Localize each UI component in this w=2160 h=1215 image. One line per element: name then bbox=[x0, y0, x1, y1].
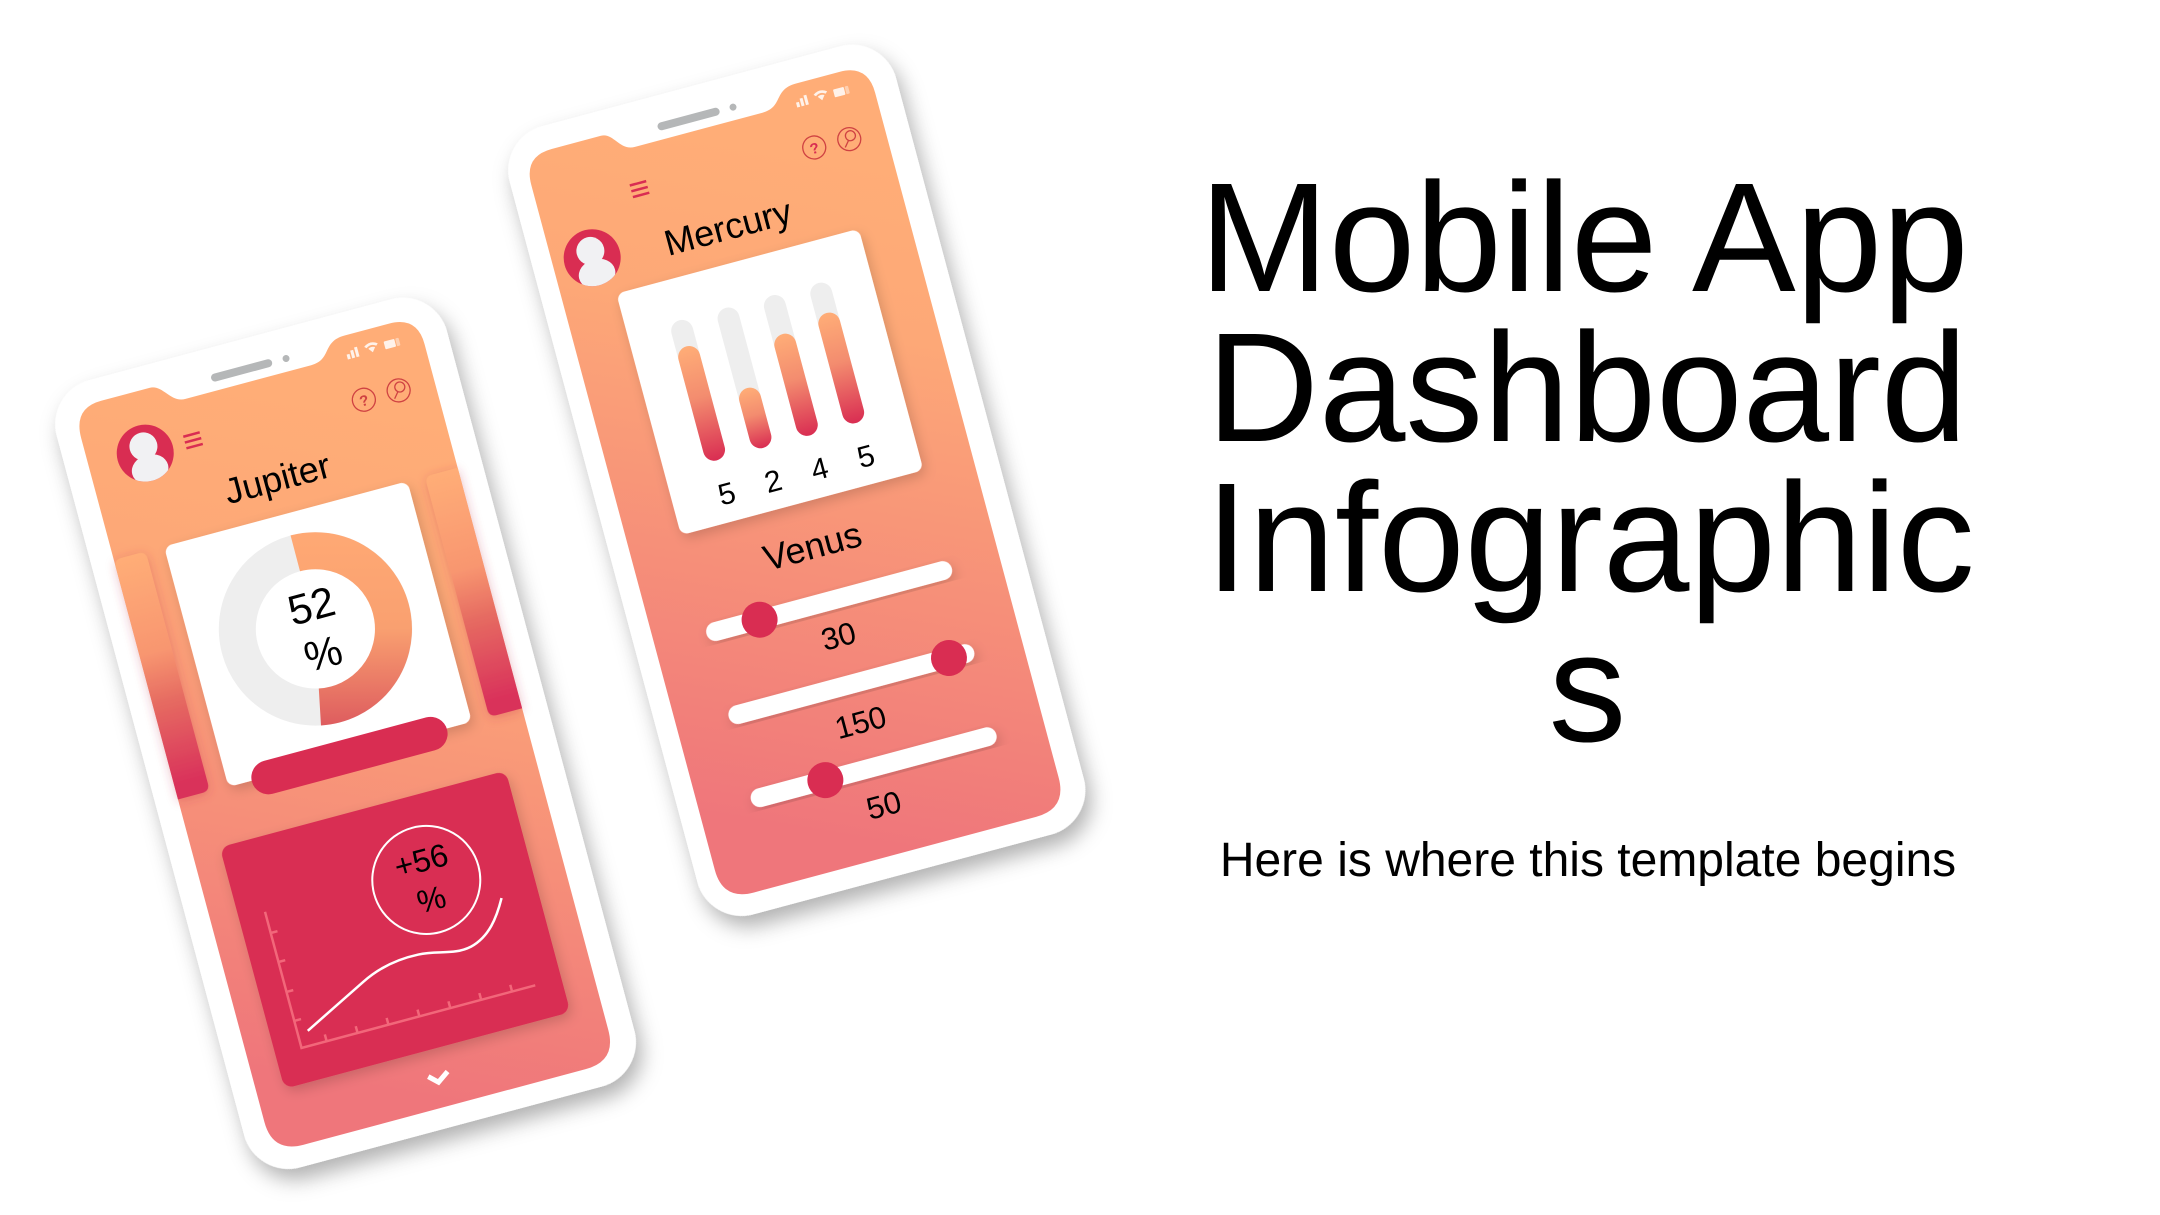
help icon bbox=[350, 386, 378, 414]
callout value: +56 bbox=[390, 836, 452, 885]
slider 50: 50 bbox=[863, 784, 905, 827]
line chart card bbox=[220, 771, 570, 1089]
trend line bbox=[288, 898, 522, 1031]
phone case bbox=[498, 34, 1096, 926]
title: Dashboard bbox=[1207, 300, 1967, 474]
slider 50 bbox=[746, 717, 1011, 855]
help icon: ? bbox=[358, 392, 371, 411]
slider 30 bbox=[702, 551, 966, 686]
camera dot bbox=[729, 103, 737, 111]
slider 150: 150 bbox=[831, 699, 890, 746]
axes bbox=[265, 849, 535, 1048]
phone: Mercury and Venus bbox=[498, 34, 1096, 926]
menu icon bbox=[183, 432, 203, 448]
speaker bbox=[662, 112, 716, 126]
phone: Jupiter bbox=[45, 287, 646, 1179]
callout circle bbox=[360, 814, 492, 946]
title: Infographic bbox=[1205, 450, 1975, 624]
bar values: 2 bbox=[761, 464, 786, 500]
heading: Mercury: Mercury bbox=[660, 190, 796, 264]
bar chart card bbox=[616, 229, 923, 535]
search icon bbox=[835, 125, 863, 153]
slider 150 bbox=[724, 634, 989, 772]
donut card bbox=[164, 481, 472, 787]
menu icon bbox=[630, 181, 649, 197]
side panel right bbox=[425, 468, 522, 717]
help icon: ? bbox=[808, 140, 821, 158]
camera dot bbox=[282, 354, 290, 363]
chevron bbox=[428, 1071, 450, 1084]
slider 30: 30 bbox=[817, 615, 860, 658]
subtitle: Here is where this template begins bbox=[1220, 834, 1956, 887]
bar values: 5 bbox=[854, 439, 878, 475]
search icon bbox=[385, 376, 413, 405]
pink button bbox=[248, 713, 451, 798]
heading: Venus: Venus bbox=[759, 513, 866, 579]
heading: Jupiter: Jupiter bbox=[220, 445, 335, 512]
status icons bbox=[345, 335, 401, 359]
help icon bbox=[800, 133, 828, 162]
side panel left bbox=[114, 551, 210, 799]
avatar bbox=[116, 424, 174, 482]
bar values: 4 bbox=[807, 451, 832, 488]
avatar bbox=[564, 229, 621, 286]
phone case bbox=[45, 287, 646, 1179]
callout value: % bbox=[413, 878, 450, 920]
bar fills bbox=[676, 306, 867, 463]
phone screen bbox=[73, 316, 617, 1153]
title: Mobile App bbox=[1199, 150, 1969, 324]
bar tracks bbox=[669, 280, 867, 463]
title: s bbox=[1549, 600, 1626, 774]
bar values bbox=[715, 439, 878, 512]
bar values: 5 bbox=[715, 476, 739, 512]
donut chart bbox=[220, 533, 411, 725]
donut value: 52 bbox=[283, 577, 340, 635]
donut value: % bbox=[299, 626, 347, 681]
status icons bbox=[795, 83, 850, 107]
speaker bbox=[215, 363, 268, 377]
phone screen bbox=[524, 64, 1067, 901]
